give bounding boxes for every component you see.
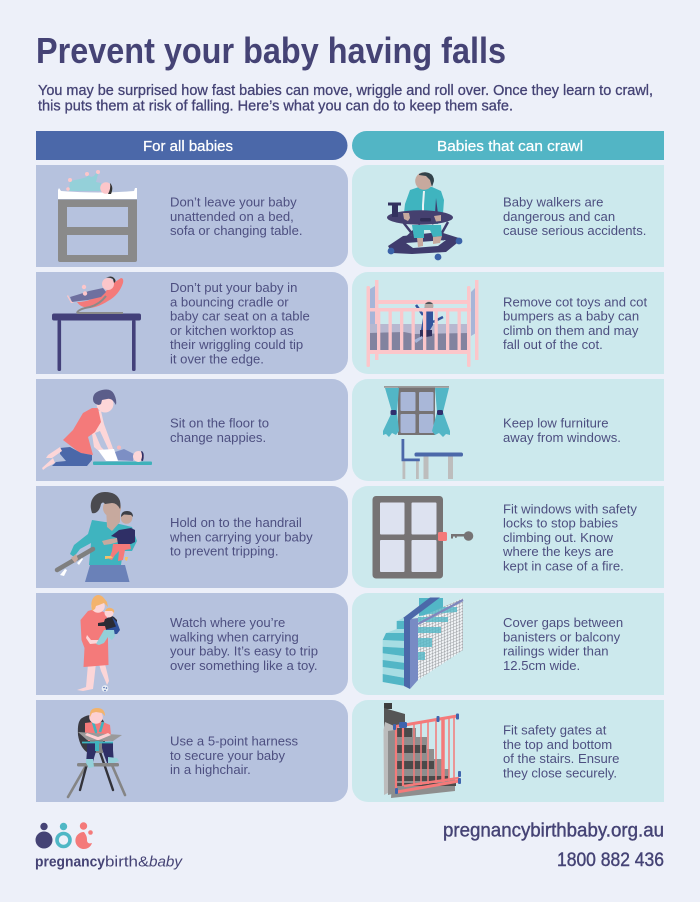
advice text: to secure your baby [170,748,285,763]
phone number: 1800 882 436 [557,850,664,871]
logo wordmark: birth [105,854,138,870]
advice text: kept in case of a fire. [503,558,624,573]
advice text: their wriggling could tip [170,337,303,352]
advice text: Baby walkers are [503,194,603,210]
panel: watch where you walk [36,593,348,695]
advice text: climbing out. Know [503,530,613,545]
advice text: Hold on to the handrail [170,515,302,530]
advice text: a bouncing cradle or [170,294,289,309]
panel: cover gaps between banisters [352,593,664,695]
advice text: bumpers as a baby can [503,309,639,324]
logo: pregnancy birth and baby [35,822,184,870]
intro text: this puts them at risk of falling. Here’s what you can do to keep them safe. [38,98,513,114]
advice text: Remove cot toys and cot [503,294,647,309]
advice text: dangerous and can [503,209,615,224]
advice text: railings wider than [503,644,609,658]
advice text: they close securely. [503,765,617,780]
icon: baby in bouncer on table [52,276,141,371]
advice text: Fit windows with safety [503,501,637,516]
advice text: over something like a toy. [170,658,318,673]
icon: baby in highchair [68,708,125,797]
panel: bouncing cradle on table [36,272,348,374]
panel: cot toys and bumpers [352,272,664,374]
advice text: climb on them and may [503,323,639,338]
icon: stairs with mesh covering banister [383,598,463,689]
panel: harness in highchair [36,700,348,802]
advice text: the top and bottom [503,737,612,752]
icon: mother changing nappy on floor [42,390,152,470]
panel: baby walkers [352,165,664,267]
advice text: Cover gaps between [503,615,623,630]
column header: for all babies: For all babies [143,139,233,155]
panel: safety gates [352,700,664,802]
logo wordmark: pregnancy [35,854,106,870]
icon: three figures [36,822,93,849]
column header: babies that can crawl: Babies that can crawl [437,139,583,155]
advice text: it over the edge. [170,351,264,366]
advice text: Use a 5-point harness [170,734,299,748]
panel: hold on to handrail [36,486,348,588]
advice text: unattended on a bed, [170,209,294,224]
advice text: fall out of the cot. [503,337,603,352]
advice text: cause serious accidents. [503,223,646,238]
advice text: walking when carrying [169,629,299,644]
advice text: Don’t leave your baby [170,194,297,210]
advice text: change nappies. [170,430,266,445]
advice text: baby car seat on a table [170,309,310,324]
icon: safety gate at stairs [384,703,461,798]
icon: window with lock and key [372,496,473,578]
panel: sit on the floor [36,379,348,481]
advice text: banisters or balcony [503,629,621,644]
advice text: your baby. It’s easy to trip [170,644,318,658]
panel: unattended on changing table [36,165,348,267]
advice text: 12.5cm wide. [503,658,580,673]
column header: babies that can crawl [352,131,664,160]
icon: window with curtains above chair and table [383,386,463,479]
advice text: Don’t put your baby in [170,280,297,295]
title: Prevent your baby having falls [36,30,506,71]
advice text: when carrying your baby [169,529,313,544]
advice text: where the keys are [502,544,614,559]
advice text: Watch where you’re [170,615,285,630]
advice text: Sit on the floor to [170,416,269,430]
logo wordmark: baby [149,854,184,870]
advice text: of the stairs. Ensure [503,751,619,766]
intro text: You may be surprised how fast babies can move, wriggle and roll over. Once they learn to crawl, [38,83,653,99]
advice text: Keep low furniture [503,416,609,430]
advice text: to prevent tripping. [170,544,278,558]
advice text: sofa or changing table. [170,223,302,238]
icon: baby on changing table [58,170,137,262]
advice text: or kitchen worktop as [170,323,294,338]
icon: baby in walker [387,172,462,260]
icon: mother walking with baby and ball on floor [77,595,120,692]
icon: toy ball [102,685,108,692]
column header: for all babies [36,131,348,160]
icon: mother carrying baby on stairs with handrail [57,492,137,582]
website: pregnancybirthbaby.org.au [443,820,664,842]
panel: window safety locks [352,486,664,588]
panel: low furniture away from windows [352,379,664,481]
advice text: in a highchair. [170,762,251,777]
icon: baby in cot [366,280,478,367]
advice text: Fit safety gates at [503,722,607,738]
logo wordmark: & [138,854,149,870]
advice text: away from windows. [503,430,621,445]
advice text: locks to stop babies [503,516,618,530]
